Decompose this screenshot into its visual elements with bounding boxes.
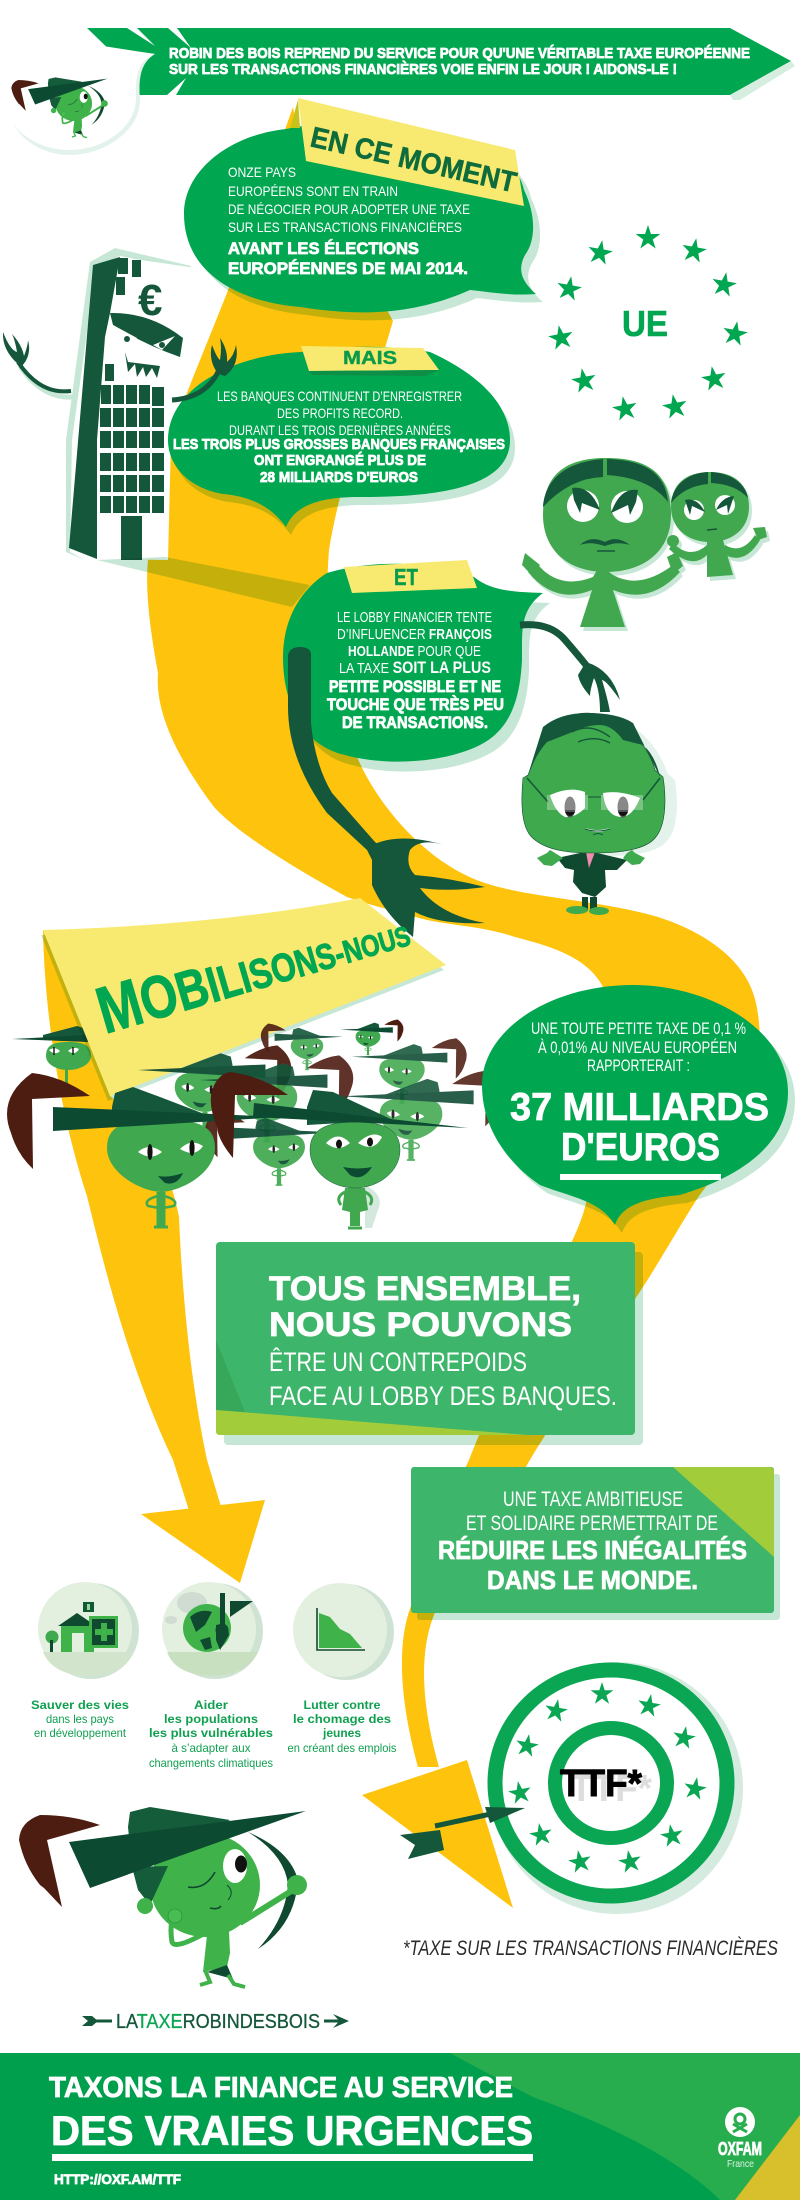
caption: sauver des vies	[31, 1698, 129, 1740]
footer band: TAXONS LA FINANCE AU SERVICE	[49, 2072, 513, 2104]
panel: tous ensemble	[216, 1242, 643, 1445]
speech bubble: mais: MAIS	[343, 348, 397, 368]
speech bubble: mais: DURANT LES TROIS DERNIÈRES ANNÉES	[229, 422, 451, 438]
speech bubble: mais: LES TROIS PLUS GROSSES BANQUES FRANÇAISES	[173, 437, 505, 453]
speech bubble: en ce moment: ONZE PAYS	[228, 164, 296, 180]
top banner: SUR LES TRANSACTIONS FINANCIÈRES VOIE ENFIN LE JOUR ! AIDONS-LE !	[169, 61, 677, 78]
lobby arm with claw over bubble	[288, 647, 485, 937]
EU stars ring: UE	[622, 303, 668, 344]
speech bubble: en ce moment	[184, 98, 543, 320]
target: TTF with stars: TTF*	[560, 1763, 642, 1805]
yellow ribbon: main path	[147, 107, 760, 1908]
footer band	[0, 2053, 800, 2200]
speech bubble: et: DE TRANSACTIONS.	[342, 714, 488, 732]
caption: lutter contre: le chomage des	[293, 1712, 391, 1726]
campaign hashtag with arrows: LATAXEROBINDESBOIS	[116, 2011, 320, 2033]
footer band: HTTP://OXF.AM/TTF	[54, 2171, 181, 2187]
speech bubble: en ce moment: AVANT LES ÉLECTIONS	[228, 239, 419, 258]
Hollande character	[522, 713, 677, 915]
caption: aider les populations: changements climatiques	[149, 1756, 273, 1770]
caption: aider les populations	[149, 1698, 273, 1770]
caption: lutter contre: en créant des emplois	[288, 1741, 396, 1755]
panel: une taxe ambitieuse: RÉDUIRE LES INÉGALITÉS	[438, 1535, 747, 1565]
caption: sauver des vies: en développement	[34, 1726, 127, 1740]
crowd of archers	[7, 1019, 500, 1228]
building ground shadow	[97, 557, 310, 607]
caption: aider les populations: les populations	[164, 1712, 258, 1726]
target: TTF with stars	[495, 1670, 735, 1906]
speech bubble: mais: LES BANQUES CONTINUENT D’ENREGISTRER	[217, 388, 462, 404]
speech bubble: 37 milliards	[482, 985, 795, 1233]
icon: globe and thermometer	[162, 1582, 263, 1679]
speech bubble: et: LE LOBBY FINANCIER TENTE	[337, 610, 492, 626]
top banner: ROBIN DES BOIS REPREND DU SERVICE POUR QU'UNE VÉRITABLE TAXE EUROPÉENNE	[169, 45, 750, 62]
speech bubble: et	[283, 560, 550, 772]
panel: une taxe ambitieuse: ET SOLIDAIRE PERMETTRAIT DE	[466, 1512, 718, 1535]
top banner	[87, 28, 795, 100]
panel: une taxe ambitieuse: DANS LE MONDE.	[487, 1565, 698, 1595]
arrow into target	[400, 1807, 525, 1859]
speech bubble: mais: 28 MILLIARDS D'EUROS	[260, 470, 418, 486]
oxfam logo	[718, 2107, 762, 2170]
speech bubble: en ce moment: EUROPÉENS SONT EN TRAIN	[228, 183, 398, 199]
icon: hospital	[38, 1582, 139, 1679]
footer band: DES VRAIES URGENCES	[51, 2107, 533, 2154]
building right arm reaching bubble	[172, 338, 237, 400]
speech bubble: 37 milliards: À 0,01% AU NIVEAU EUROPÉEN	[538, 1038, 737, 1057]
caption: aider les populations: Aider	[194, 1698, 228, 1712]
speech bubble: 37 milliards: RAPPORTERAIT :	[587, 1056, 690, 1075]
caption: aider les populations: à s’adapter aux	[172, 1741, 250, 1755]
speech bubble: et: PETITE POSSIBLE ET NE	[329, 678, 501, 696]
speech bubble: et: D’INFLUENCER FRANÇOIS	[337, 627, 492, 643]
caption: sauver des vies: dans les pays	[46, 1712, 114, 1726]
caption: lutter contre	[288, 1698, 396, 1755]
yellow ribbon: left branch arrow	[43, 930, 265, 1583]
caption: sauver des vies: Sauver des vies	[31, 1698, 129, 1712]
speech bubble: 37 milliards: D'EUROS	[561, 1126, 720, 1169]
speech bubble: et: LA TAXE SOIT LA PLUS	[339, 659, 491, 677]
small robin in white speech bubble	[5, 44, 155, 155]
speech bubble: en ce moment: SUR LES TRANSACTIONS FINANCIÈRES	[228, 219, 462, 235]
speech bubble: en ce moment: EN CE MOMENT	[307, 122, 520, 199]
caption: lutter contre: jeunes	[322, 1726, 361, 1740]
panel: tous ensemble: ÊTRE UN CONTREPOIDS	[269, 1346, 527, 1377]
mobilisons-nous banner: MOBILISONS-NOUS	[88, 887, 416, 1047]
target: TTF with stars: TTF*	[570, 1768, 652, 1810]
bank building monster	[3, 248, 196, 560]
speech bubble: mais: ONT ENGRANGÉ PLUS DE	[254, 452, 426, 469]
panel: tous ensemble: NOUS POUVONS	[269, 1306, 572, 1344]
caption: lutter contre: Lutter contre	[304, 1698, 381, 1712]
caption: aider les populations: les plus vulnérables	[149, 1726, 273, 1740]
speech bubble: mais	[168, 346, 515, 535]
big robin archer	[19, 1807, 307, 1987]
speech bubble: 37 milliards: 37 MILLIARDS	[510, 1086, 769, 1129]
panel: tous ensemble: TOUS ENSEMBLE,	[269, 1270, 581, 1308]
icon: declining chart	[293, 1583, 394, 1680]
panel: une taxe ambitieuse: UNE TAXE AMBITIEUSE	[503, 1488, 683, 1511]
oxfam logo: France	[727, 2159, 754, 2170]
oxfam logo: OXFAM	[718, 2139, 762, 2159]
speech bubble: en ce moment: EUROPÉENNES DE MAI 2014.	[228, 259, 468, 278]
bank building monster: €	[138, 276, 162, 325]
second arm reaching to Hollande	[520, 625, 620, 712]
mobilisons-nous banner	[41, 887, 446, 1101]
panel: une taxe ambitieuse	[411, 1467, 780, 1620]
speech bubble: et: TOUCHE QUE TRÈS PEU	[327, 695, 504, 714]
speech bubble: en ce moment: DE NÉGOCIER POUR ADOPTER UNE TAXE	[228, 201, 470, 217]
panel: tous ensemble: FACE AU LOBBY DES BANQUES.	[269, 1381, 617, 1411]
speech bubble: mais: DES PROFITS RECORD.	[277, 405, 403, 421]
speech bubble: et: HOLLANDE POUR QUE	[348, 644, 481, 660]
far archer behind banner	[12, 1026, 91, 1083]
speech bubble: et: ET	[394, 564, 418, 590]
angry EU politicians	[522, 458, 770, 631]
EU stars ring	[547, 225, 749, 422]
